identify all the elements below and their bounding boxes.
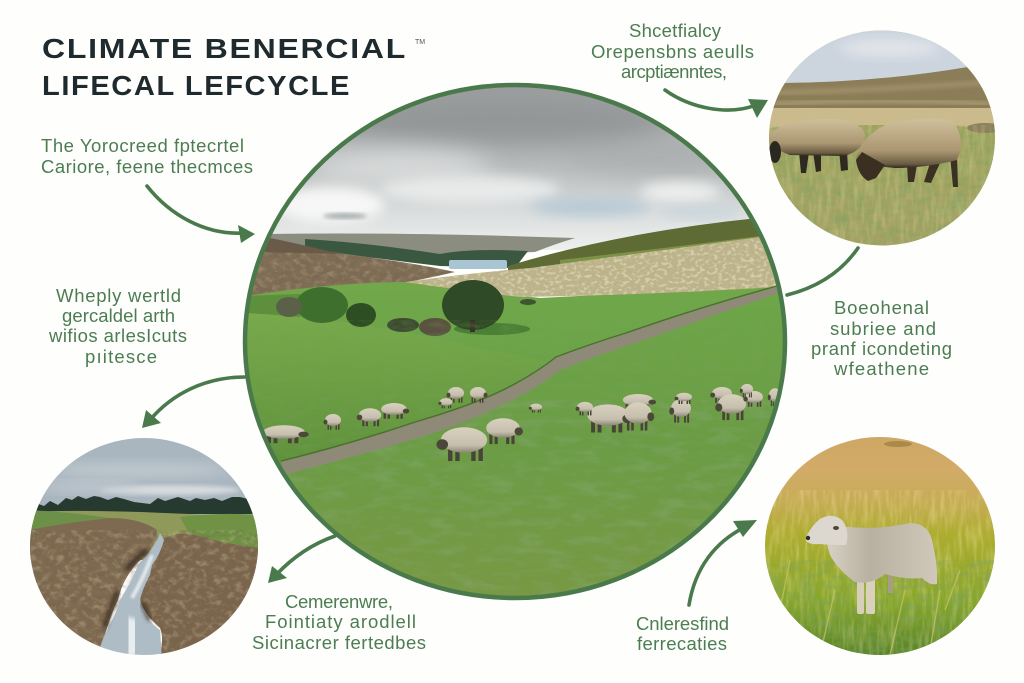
text block: top left: Cariore, feene thecmces xyxy=(41,156,253,177)
text block: middle left: gercaldel arth xyxy=(62,305,175,326)
tree line xyxy=(32,496,258,514)
text block: bottom right xyxy=(636,613,729,654)
text block: bottom centre-left: Cemerenwre, xyxy=(285,591,393,612)
text block: middle left: Wheply wertld xyxy=(56,285,181,306)
arrow: lower text to grass sheep photo xyxy=(689,520,757,605)
text block: bottom right: Cnleresfind xyxy=(636,613,729,634)
title: CLIMATE BENERCIAL xyxy=(42,33,407,64)
arrow: central circle to lower left xyxy=(268,536,335,583)
title xyxy=(42,33,425,101)
text block: top right xyxy=(591,20,754,82)
text block: middle right: pranf icondeting xyxy=(811,338,952,359)
arrow: central circle to stream photo xyxy=(142,377,245,428)
panel: bottom right sheep in grass photo xyxy=(762,434,998,658)
text block: middle right: Boeohenal xyxy=(834,297,929,318)
text block: bottom centre-left xyxy=(252,591,426,653)
central circle border xyxy=(245,85,785,598)
text block: middle right: subriee and xyxy=(830,318,936,339)
text block: bottom centre-left: Sicinacrer fertedbes xyxy=(252,632,426,653)
text block: middle left: wifios arlesIcuts xyxy=(48,325,187,346)
panel: central landscape xyxy=(240,80,790,610)
arrow: top left text to central circle xyxy=(147,186,255,243)
panel: bottom left stream photo xyxy=(28,436,260,660)
arrow: top right text to sheep photo xyxy=(665,90,768,118)
text block: middle left xyxy=(48,285,187,367)
text block: middle left: pıitesce xyxy=(85,346,157,367)
road xyxy=(281,287,779,475)
title: LIFECAL LEFCYCLE xyxy=(42,70,351,101)
text block: bottom centre-left: Fointiaty arodlell xyxy=(265,611,416,632)
text block: bottom right: ferrecaties xyxy=(637,633,727,654)
text block: top right: arcptiænntes, xyxy=(621,61,727,82)
text block: middle right xyxy=(811,297,952,379)
panel: top right sheep photo xyxy=(765,28,1003,250)
text block: top right: Orepensbns aeulls xyxy=(591,41,754,62)
text block: top left: The Yorocreed fptecrtel xyxy=(41,135,244,156)
title: TM xyxy=(415,39,425,46)
text block: top left xyxy=(41,135,253,177)
text block: top right: Shcetfialcy xyxy=(629,20,722,41)
connector: central circle to top right photo xyxy=(787,248,858,295)
text block: middle right: wfeathene xyxy=(833,358,929,379)
